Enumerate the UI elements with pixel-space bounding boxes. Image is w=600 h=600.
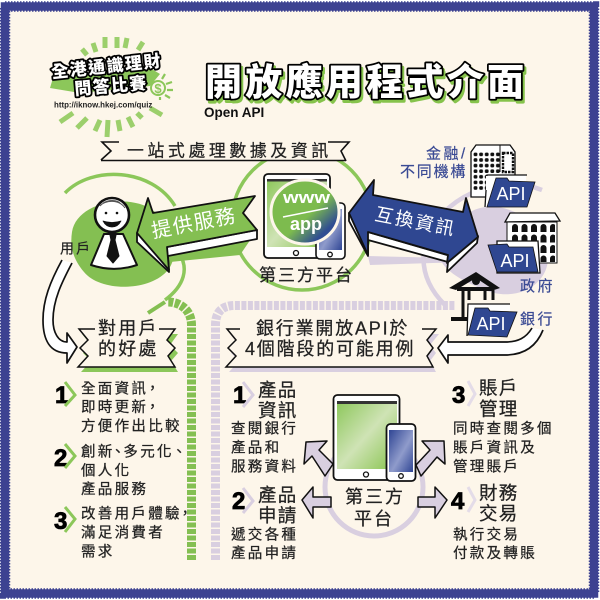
use case 4: 4	[451, 488, 465, 515]
benefit 2: 產品服務	[81, 481, 148, 498]
benefit 3: 3	[54, 508, 67, 535]
user label: 用戶	[60, 240, 92, 256]
arrow: exchange information	[349, 180, 478, 272]
icon: finance building	[471, 145, 515, 197]
use case 3: 3	[452, 382, 465, 409]
lilac blob and ring: institutions	[423, 184, 548, 305]
benefit 2: 2	[54, 445, 67, 472]
use case 1: 查閱銀行	[231, 420, 298, 438]
green blob	[71, 201, 174, 287]
use case 3	[452, 378, 554, 476]
icon: finance API folder	[485, 175, 535, 207]
benefit 3: 改善用戶體驗，	[81, 506, 195, 522]
lilac dashed route	[216, 306, 455, 560]
use case 1: 產品	[258, 380, 297, 400]
use case 1	[231, 380, 298, 476]
use case 2: 遞交各種	[231, 526, 298, 544]
icon: bank building	[449, 272, 500, 321]
arrow: provide service: 提供服務	[150, 204, 238, 243]
icon: government API folder: API	[500, 251, 530, 271]
use case 2	[231, 484, 298, 562]
www app badge: www	[282, 188, 331, 207]
arrow: up left	[304, 441, 333, 476]
use case 2: 申請	[258, 505, 297, 526]
ribbon heading: use cases: 4個階段的可能用例	[245, 339, 415, 359]
green route end	[148, 302, 165, 313]
phone	[316, 203, 345, 259]
www app badge	[271, 180, 339, 244]
benefit 1	[55, 380, 182, 435]
ribbon heading: use cases	[226, 318, 439, 372]
ribbon heading: benefits	[78, 318, 178, 372]
use case 4: 財務	[479, 482, 518, 504]
use case 4: 付款及轉賬	[453, 545, 537, 562]
arrow: provide service	[137, 196, 257, 272]
person icon	[91, 198, 137, 269]
bank label: 銀行	[520, 311, 555, 328]
ribbon heading: use cases: 銀行業開放API於	[256, 318, 409, 338]
ring	[65, 174, 184, 300]
sunburst rays	[60, 37, 162, 137]
finance label: 不同機構	[400, 164, 467, 180]
finance label	[400, 146, 468, 180]
phone	[386, 424, 416, 481]
ribbon: one-stop: 一站式處理數據及資訊	[127, 142, 332, 160]
use case 2: 產品	[258, 484, 297, 506]
use case 3: 管理	[479, 398, 518, 420]
subtitle: Open API	[204, 105, 264, 120]
benefit 2: 個人化	[81, 462, 131, 480]
benefit 2: 創新、多元化、	[81, 442, 189, 460]
use case 1: 產品和	[231, 440, 281, 456]
panel: open banking use cases	[226, 318, 554, 562]
central platform diagram	[302, 395, 447, 536]
benefit 1: 1	[55, 382, 68, 409]
tablet	[264, 174, 330, 258]
icon: government building	[505, 213, 560, 263]
benefit 1: 即時更新，	[81, 399, 162, 416]
arrow: left	[302, 487, 331, 518]
use case 1: 資訊	[258, 400, 297, 421]
platform label: 平台	[354, 509, 394, 529]
platform label	[345, 487, 405, 529]
icon: bank API folder: API	[476, 314, 506, 334]
badge title line 2: 問答比賽	[74, 73, 148, 99]
green dashed route	[168, 302, 192, 560]
use case 1: 1	[233, 382, 246, 409]
use case 2: 2	[232, 488, 245, 515]
tablet	[334, 395, 400, 480]
arrow: bank to use cases	[438, 328, 543, 363]
use case 1: 服務資料	[231, 458, 298, 476]
use case 4: 交易	[479, 503, 518, 524]
arrow: exchange information: 互換資訊	[373, 203, 458, 240]
use case 4: 執行交易	[453, 526, 520, 544]
lilac ring	[325, 438, 423, 536]
badge url: http://iknow.hkej.com/quiz	[54, 100, 152, 110]
government label: 政府	[520, 278, 555, 295]
use case 3: 管理賬戶	[453, 458, 520, 476]
use case 4	[451, 482, 537, 562]
benefit 1: 方便作出比較	[81, 417, 182, 435]
panel: user benefits	[54, 318, 195, 560]
third-party platform devices	[259, 174, 354, 285]
arrow: user to benefits	[43, 260, 77, 363]
quiz badge	[50, 37, 173, 137]
dollar icon: $	[154, 81, 162, 96]
title: 開放應用程式介面	[205, 61, 527, 103]
platform label: 第三方	[345, 487, 405, 507]
ribbon heading: benefits: 的好處	[98, 339, 159, 359]
platform label: 第三方平台	[259, 266, 354, 285]
benefit 2	[54, 442, 189, 498]
large green ring: third-party platform	[232, 150, 372, 290]
use case 2: 產品申請	[231, 545, 298, 562]
icon: finance API folder: API	[496, 184, 526, 204]
www app badge: app	[290, 214, 322, 234]
green band	[50, 68, 160, 93]
benefit 3: 滿足消費者	[81, 524, 165, 542]
finance label: 金融/	[426, 146, 468, 162]
benefit 3	[54, 506, 195, 560]
ribbon heading: benefits: 對用戶	[98, 318, 159, 338]
use case 3: 賬戶資訊及	[453, 440, 537, 456]
user circle	[60, 174, 184, 300]
arrow: up right	[416, 441, 445, 476]
use case 3: 賬戶	[479, 378, 518, 398]
badge title line 1: 全港通識理財	[50, 50, 163, 82]
benefit 3: 需求	[81, 544, 115, 560]
benefit 1: 全面資訊，	[81, 380, 162, 398]
arrow: right	[418, 487, 447, 518]
icon: government API folder	[488, 241, 540, 273]
icon: bank API folder	[467, 304, 517, 337]
use case 3: 同時查閱多個	[453, 420, 554, 438]
